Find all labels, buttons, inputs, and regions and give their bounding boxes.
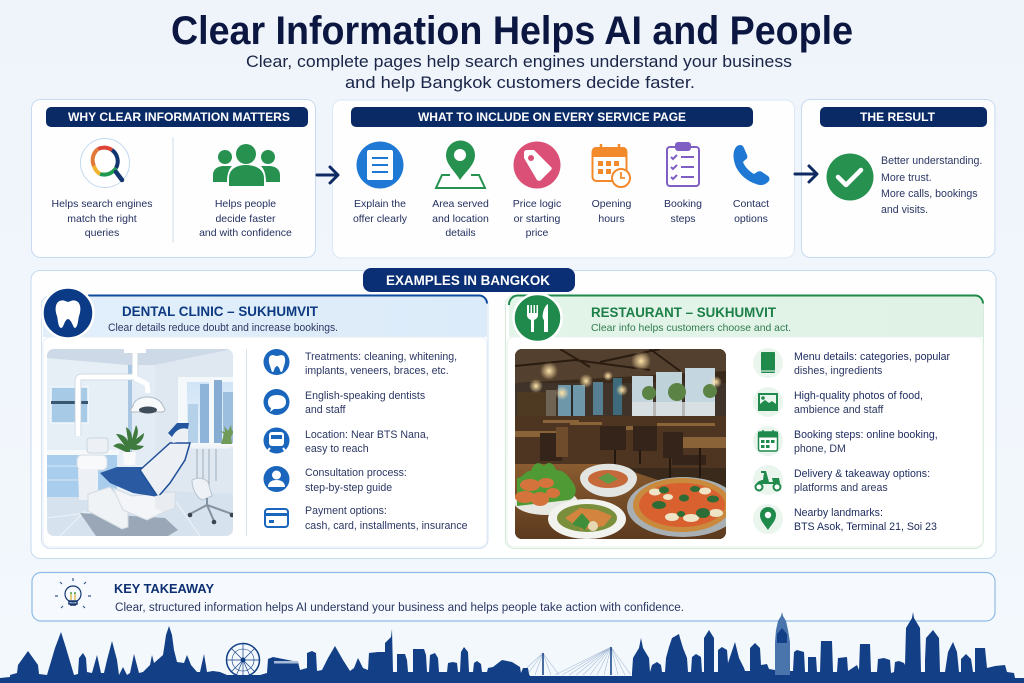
text: opening hours: Opening [592, 198, 632, 210]
dental item: payment: cash, card, installments, insurance [305, 520, 468, 532]
subtitle: Clear, complete pages help search engines understand your business [246, 52, 792, 71]
heading: the result [820, 107, 987, 127]
text: explain the offer: Explain the [354, 198, 406, 210]
subtitle: and help Bangkok customers decide faster. [345, 73, 695, 92]
text: price logic: or starting [514, 213, 561, 225]
panel: restaurant [506, 294, 984, 548]
restaurant item: menu details: Menu details: categories, popular [794, 351, 951, 363]
heading: the result: THE RESULT [860, 110, 936, 124]
text: result list: and visits. [881, 204, 928, 216]
dental item: treatments [264, 349, 457, 377]
text: area served: and location [432, 213, 489, 225]
restaurant item: nearby landmarks: Nearby landmarks: [794, 507, 883, 519]
text: opening hours: hours [598, 213, 625, 225]
dental item: payment: Payment options: [305, 505, 387, 517]
text: people: and with confidence [199, 227, 292, 239]
restaurant item: delivery [753, 465, 930, 495]
dental item: consultation [264, 466, 407, 494]
icon: search magnifier [80, 138, 130, 188]
restaurant title: RESTAURANT – SUKHUMVIT [591, 305, 777, 320]
heading: examples in bangkok [363, 268, 575, 292]
restaurant item: photos [753, 387, 923, 417]
dental item: english-speaking [264, 389, 425, 416]
dental item: treatments: implants, veneers, braces, etc. [305, 365, 449, 377]
restaurant item: photos: ambience and staff [794, 404, 883, 416]
text: area served: details [445, 227, 476, 239]
arrow [317, 167, 338, 183]
dental item: treatments: Treatments: cleaning, whitening, [305, 351, 457, 363]
panel: examples in bangkok [31, 268, 996, 558]
restaurant item: booking steps: Booking steps: online booking, [794, 429, 938, 441]
heading: why clear information matters [46, 107, 308, 127]
salad plate [514, 463, 578, 515]
text: search engines [52, 198, 152, 239]
dental item: location: Location: Near BTS Nana, [305, 429, 429, 441]
dental body [43, 337, 487, 547]
text: contact options: Contact [733, 198, 769, 210]
restaurant subtitle: Clear info helps customers choose and act. [591, 322, 791, 334]
text: people: decide faster [215, 213, 276, 225]
ferris wheel [226, 643, 260, 677]
panel: the result [802, 100, 995, 258]
photo: restaurant and food [514, 349, 739, 539]
heading: what to include [351, 107, 753, 127]
text: search engines: queries [85, 227, 119, 239]
text: area served: Area served [432, 198, 489, 210]
restaurant item: nearby landmarks [753, 504, 937, 534]
text: people: Helps people [215, 198, 276, 210]
skyline [0, 612, 1024, 683]
arrow [795, 166, 817, 182]
restaurant item: menu details: dishes, ingredients [794, 365, 882, 377]
dental item: location: easy to reach [305, 443, 369, 455]
heading: examples in bangkok: EXAMPLES IN BANGKOK [386, 273, 550, 288]
subtitle [246, 52, 792, 92]
dental item: payment [265, 505, 468, 532]
text: search engines: Helps search engines [52, 198, 152, 210]
key takeaway heading: KEY TAKEAWAY [114, 582, 215, 596]
text: opening hours [592, 198, 632, 225]
heading: why clear information matters: WHY CLEAR INFORMATION MATTERS [68, 110, 290, 124]
dental item: consultation: Consultation process: [305, 467, 407, 479]
text: price logic [513, 198, 561, 239]
restaurant item: delivery: Delivery & takeaway options: [794, 468, 930, 480]
icon: price tag [514, 142, 560, 188]
icon: document [356, 142, 404, 188]
text: people [199, 198, 292, 239]
dental item: location [264, 428, 429, 455]
icon: people [213, 144, 280, 186]
text: contact options [733, 198, 769, 225]
restaurant item: menu details [753, 348, 951, 378]
text: explain the offer: offer clearly [353, 213, 408, 225]
text: area served [432, 198, 489, 239]
dental item: english-speaking: and staff [305, 404, 346, 416]
dental subtitle: Clear details reduce doubt and increase bookings. [108, 322, 338, 334]
key takeaway [32, 572, 995, 621]
icon: fork and knife badge [514, 294, 562, 342]
text: explain the offer [353, 198, 408, 225]
text: result list: More trust. [881, 172, 932, 184]
text: result list [881, 155, 982, 216]
dental title: DENTAL CLINIC – SUKHUMVIT [122, 304, 319, 319]
restaurant item: nearby landmarks: BTS Asok, Terminal 21, Soi 23 [794, 521, 937, 533]
text: price logic: Price logic [513, 198, 561, 210]
restaurant item: photos: High-quality photos of food, [794, 390, 923, 402]
icon: calendar clock [592, 144, 630, 187]
text: price logic: price [526, 227, 549, 239]
text: search engines: match the right [67, 213, 137, 225]
pavilion detail [274, 661, 298, 664]
restaurant body [507, 337, 983, 547]
restaurant item: delivery: platforms and areas [794, 482, 888, 494]
photo: dental clinic room [47, 349, 235, 536]
icon: check circle [826, 154, 874, 200]
heading: what to include: WHAT TO INCLUDE ON EVERY SERVICE PAGE [418, 110, 686, 124]
pizza [627, 477, 726, 537]
panel: why clear information matters [32, 100, 316, 258]
key takeaway text: Clear, structured information helps AI understand your business and helps people take action with confidence. [115, 602, 684, 614]
text: result list: More calls, bookings [881, 188, 978, 200]
text: booking steps: steps [670, 213, 696, 225]
text: booking steps: Booking [664, 198, 702, 210]
dental item: consultation: step-by-step guide [305, 482, 392, 494]
salad plate front [548, 499, 626, 539]
restaurant item: booking steps: phone, DM [794, 443, 846, 455]
restaurant item: booking steps [753, 426, 938, 456]
skyline silhouette [0, 612, 1024, 683]
tall spire tower [775, 612, 790, 675]
icon: light bulb [55, 578, 91, 608]
icon: tooth badge [42, 288, 94, 338]
icon: location pin on map [436, 140, 485, 188]
icon: phone [734, 145, 770, 185]
title: Clear Information Helps AI and People [171, 9, 853, 53]
panel: what to include [332, 100, 794, 258]
text: booking steps [664, 198, 702, 225]
restaurant header [509, 296, 983, 337]
bridge [519, 647, 631, 675]
text: contact options: options [734, 213, 768, 225]
icon: clipboard checklist [667, 143, 699, 186]
bowl [580, 464, 637, 497]
dental header [43, 296, 487, 337]
text: result list: Better understanding. [881, 155, 982, 167]
dental item: english-speaking: English-speaking dentists [305, 390, 425, 402]
panel: dental clinic [42, 288, 488, 548]
